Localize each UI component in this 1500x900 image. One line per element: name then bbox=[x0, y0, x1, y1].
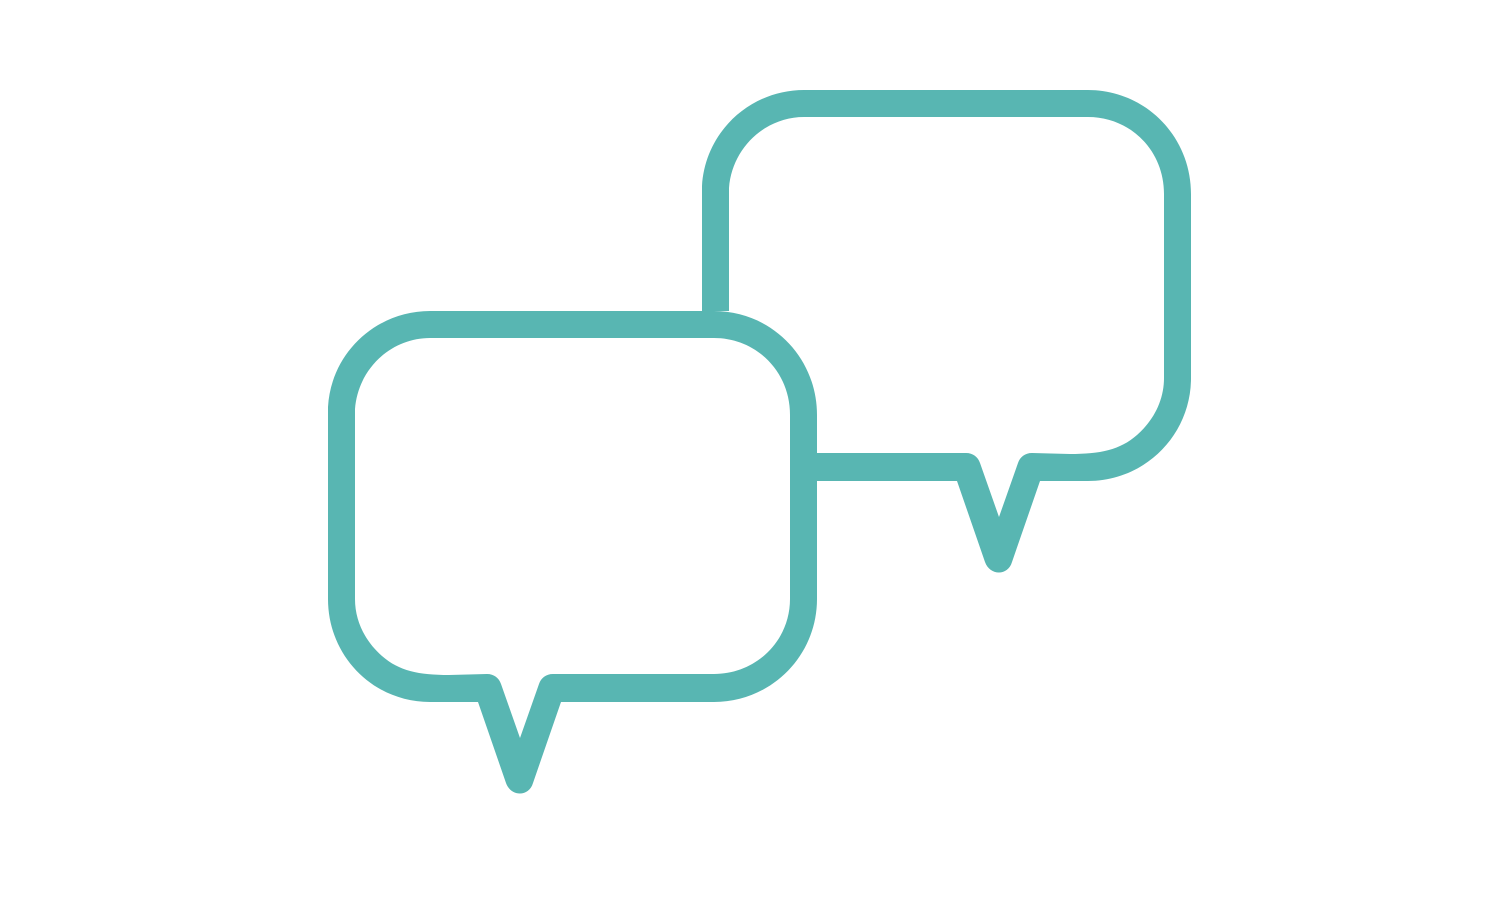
icon: back speech bubble bbox=[702, 90, 1191, 572]
icon: front speech bubble bbox=[328, 311, 817, 794]
